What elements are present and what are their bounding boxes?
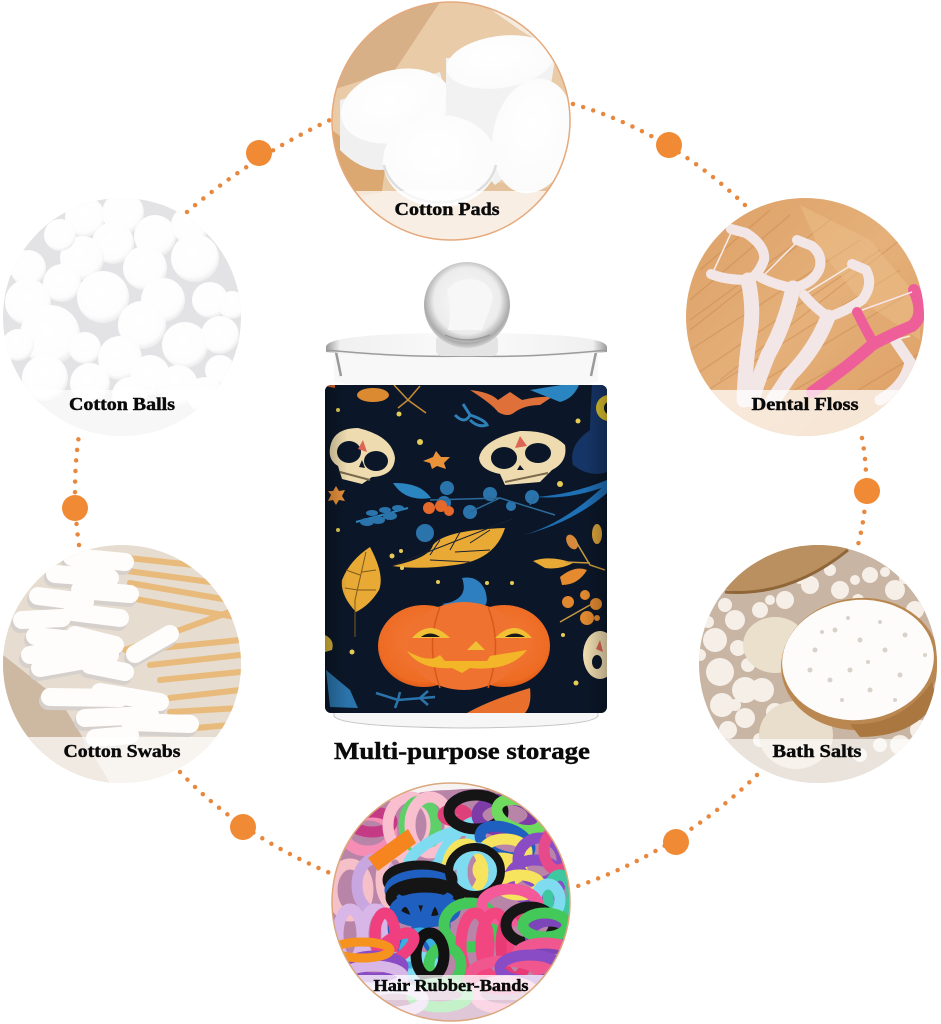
label: dental floss: Dental Floss [752, 394, 858, 414]
dotted connector: cotton swabs to cotton balls [75, 435, 79, 545]
jar wrap: halloween pattern [325, 378, 622, 713]
jar curvature shading [325, 385, 607, 713]
pattern: left skull [330, 428, 395, 484]
jar knob [424, 262, 510, 356]
label: cotton pads: Cotton Pads [394, 199, 500, 219]
panel: cotton balls [2, 192, 246, 438]
dotted connector: dental floss to bath salts [858, 438, 866, 545]
pattern: blue sprig [455, 404, 487, 426]
pattern: pumpkin [378, 578, 550, 690]
label: cotton balls: Cotton Balls [69, 394, 175, 414]
pattern: blue leaves and berries [356, 480, 607, 542]
panel: dental floss [686, 198, 925, 440]
label: hair rubber-bands: Hair Rubber-Bands [374, 976, 529, 995]
panel: cotton pads [330, 2, 584, 241]
panel: bath salts [694, 545, 941, 785]
pattern: yellow specks [336, 408, 580, 686]
caption: multi-purpose storage: Multi-purpose storage [334, 739, 590, 765]
pattern: right skull [479, 431, 565, 485]
dotted connector: hair bands to cotton swabs [180, 772, 330, 873]
product: jar [325, 262, 622, 728]
pattern: bottom leaves [325, 635, 530, 713]
pattern: yellow leaves [342, 519, 512, 637]
pattern: flowers [328, 451, 450, 505]
pattern: orange berries [423, 500, 454, 516]
pattern: top leaves and branch [327, 385, 426, 414]
pattern: owl [572, 385, 607, 474]
jar base [334, 700, 598, 728]
dotted connector: bath salts to hair bands [578, 775, 757, 886]
pattern: right sprig and berries [533, 524, 605, 625]
label: cotton swabs: Cotton Swabs [64, 741, 180, 761]
dotted connector: cotton pads to dental floss [573, 104, 748, 208]
pattern: top blue leaf [530, 385, 579, 402]
pattern: lower right skull [583, 631, 607, 679]
pattern: bat [470, 390, 552, 415]
dotted connector: cotton balls to cotton pads [187, 120, 330, 212]
connector node dots [62, 132, 880, 855]
panel: cotton swabs [3, 545, 241, 785]
panel: hair rubber-bands [332, 783, 573, 1021]
jar lid [326, 333, 607, 392]
label: bath salts: Bath Salts [772, 741, 862, 761]
